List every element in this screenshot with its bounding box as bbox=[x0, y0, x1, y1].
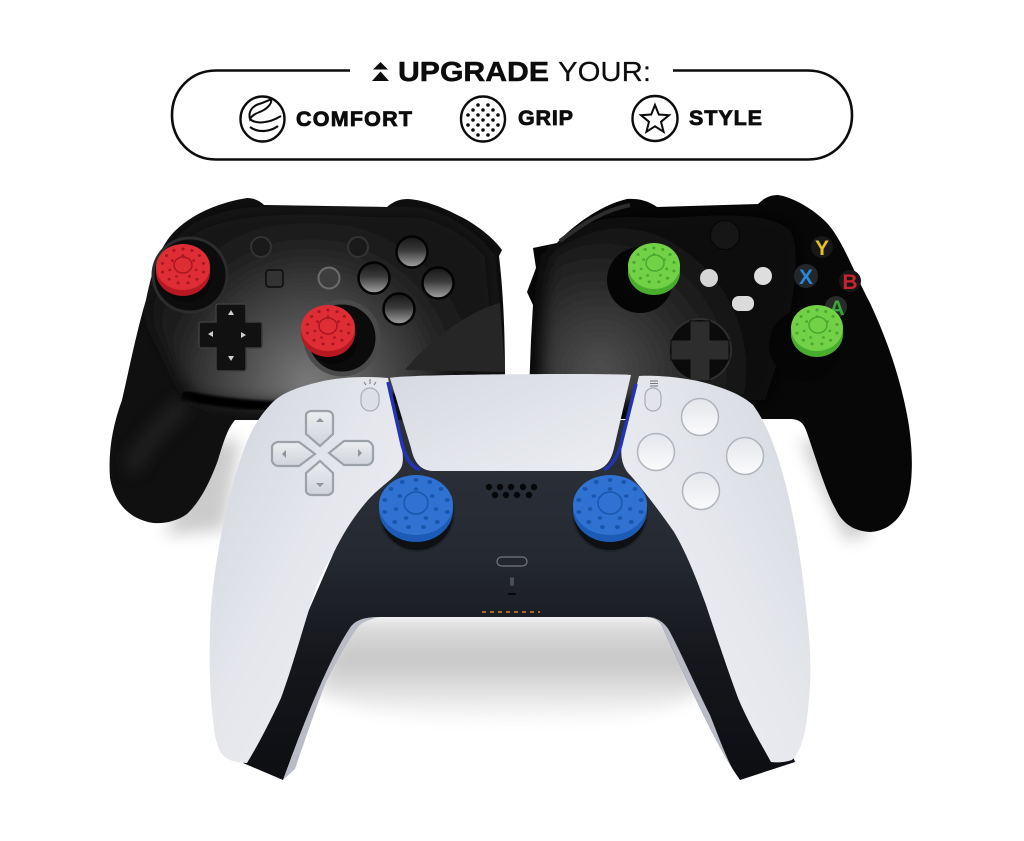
icon: double up arrows bbox=[372, 62, 389, 81]
touchpad bbox=[390, 374, 631, 471]
black core and lower edge bbox=[243, 420, 795, 780]
green thumb grip left bbox=[628, 243, 680, 295]
heading: UPGRADE bbox=[398, 56, 549, 87]
banner: upgrade your bbox=[172, 56, 852, 160]
controller: black Xbox style pad bbox=[527, 195, 912, 532]
guide button bbox=[710, 220, 740, 250]
small minus and plus buttons bbox=[251, 237, 368, 257]
grip sliver right bbox=[645, 617, 740, 780]
icon: style bbox=[632, 96, 678, 141]
face lower edge bbox=[182, 395, 420, 406]
face shading bbox=[534, 226, 746, 408]
d-pad bbox=[199, 304, 262, 371]
icon: grip bbox=[461, 96, 505, 142]
icon: comfort bbox=[240, 96, 284, 142]
touchpad blue light bars bbox=[388, 382, 636, 470]
speaker grille bbox=[486, 484, 537, 498]
red thumb grip left bbox=[156, 244, 211, 302]
ps button bbox=[497, 557, 527, 566]
abxy buttons bbox=[794, 236, 861, 320]
right stick well bbox=[573, 477, 647, 551]
abxy buttons: A bbox=[829, 297, 845, 320]
label: style: STYLE bbox=[689, 106, 762, 130]
blue thumb grip left bbox=[379, 475, 453, 542]
grip sliver left bbox=[283, 617, 380, 780]
abxy buttons: X bbox=[799, 266, 813, 289]
body bbox=[527, 195, 912, 532]
right stick well bbox=[769, 309, 841, 381]
abxy buttons: B bbox=[842, 271, 858, 294]
textured right grip bbox=[405, 303, 505, 372]
capture button bbox=[266, 270, 283, 287]
left stick well bbox=[153, 238, 227, 312]
infographic canvas bbox=[110, 62, 912, 780]
abxy buttons: Y bbox=[815, 237, 829, 260]
controller: white PlayStation style pad bbox=[210, 374, 810, 780]
d-pad bbox=[272, 411, 373, 495]
create button bbox=[361, 379, 379, 411]
top bumper highlight bbox=[560, 205, 630, 241]
left stick well bbox=[380, 477, 454, 551]
label: comfort: COMFORT bbox=[296, 107, 412, 131]
red thumb grip right bbox=[301, 305, 357, 364]
body bbox=[110, 198, 505, 523]
right white wing bbox=[621, 376, 810, 762]
blue thumb grip right bbox=[573, 475, 647, 542]
d-pad disc bbox=[669, 319, 731, 381]
left white wing bbox=[210, 377, 403, 763]
floor shadow bbox=[315, 618, 705, 724]
face buttons bbox=[358, 236, 454, 324]
label: grip: GRIP bbox=[518, 106, 573, 130]
left grip highlight bbox=[130, 402, 185, 470]
face buttons bbox=[638, 398, 764, 510]
right stick well bbox=[306, 302, 378, 374]
view menu and share buttons bbox=[700, 267, 772, 311]
controller shadows bbox=[165, 440, 870, 540]
controller: black Nintendo style pro pad bbox=[110, 198, 505, 523]
mute button bbox=[508, 577, 516, 595]
heading light word: YOUR: bbox=[558, 56, 651, 87]
banner outline bbox=[172, 70, 852, 160]
left stick well bbox=[607, 247, 673, 313]
face plate bbox=[148, 211, 497, 404]
d-pad arrows bbox=[282, 418, 362, 487]
home button bbox=[318, 268, 340, 288]
green thumb grip right bbox=[791, 305, 843, 357]
charging contacts bbox=[482, 611, 540, 613]
options button bbox=[645, 381, 661, 411]
